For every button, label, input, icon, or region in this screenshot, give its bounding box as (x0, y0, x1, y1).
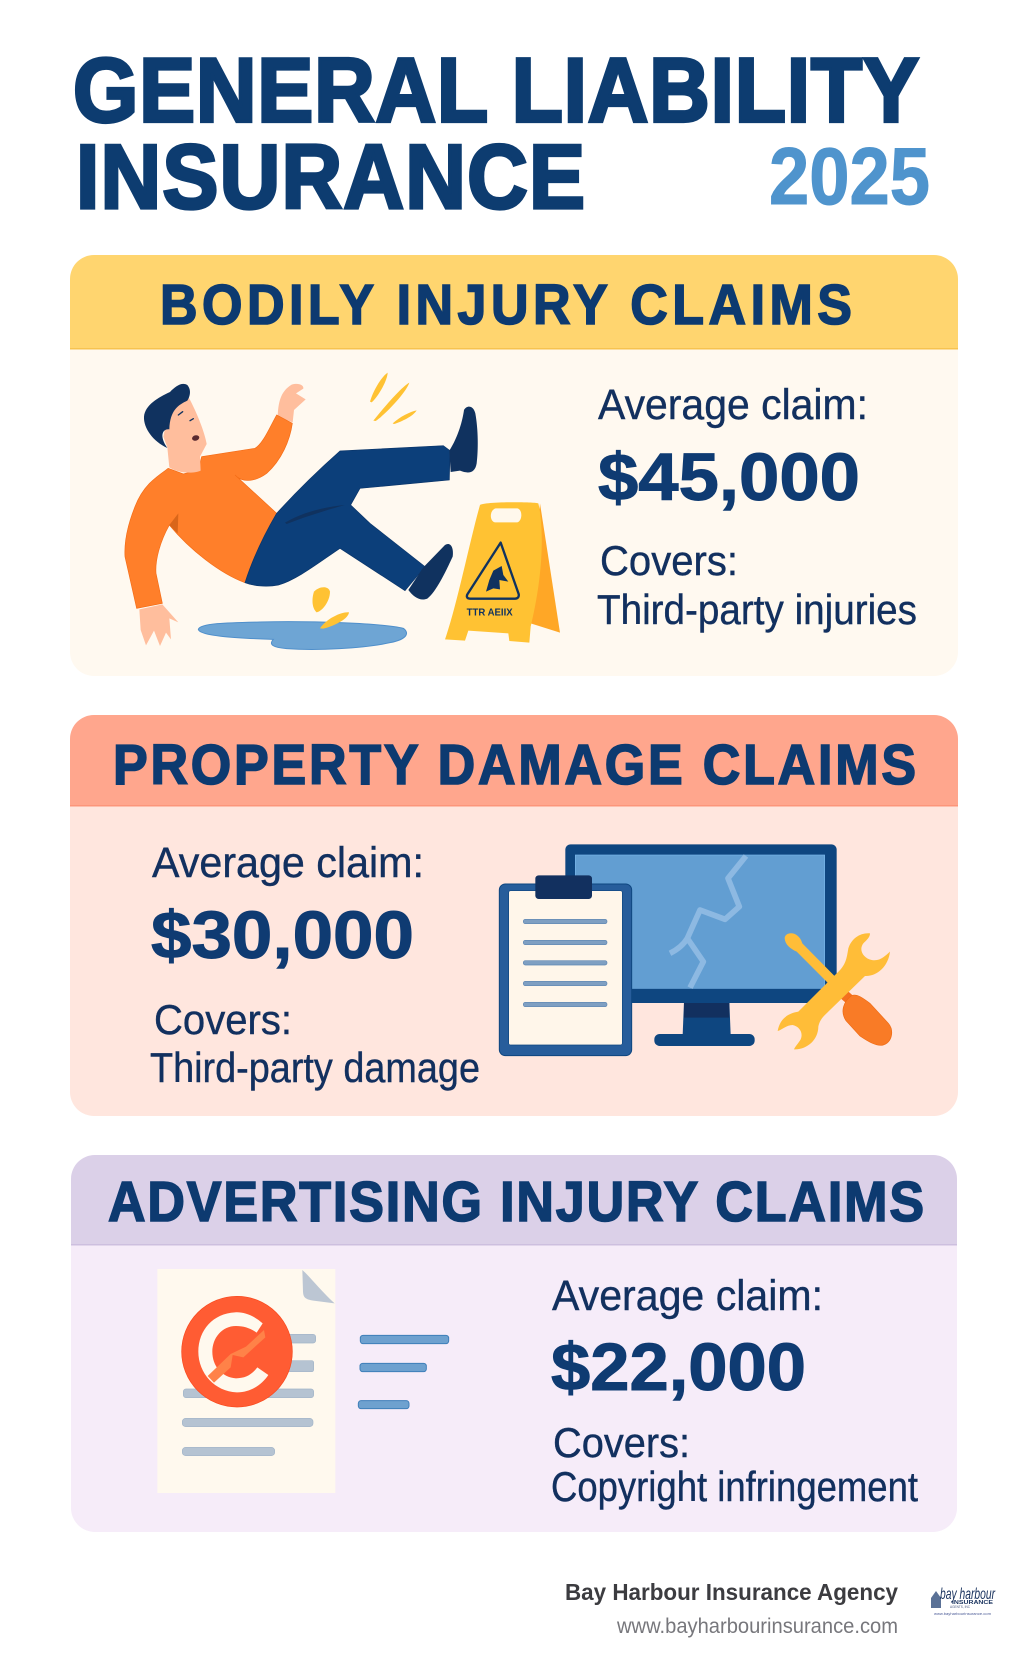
text: average claim label: Average claim: (152, 839, 424, 887)
lower hand (139, 604, 178, 646)
text: covers: Covers: (154, 996, 292, 1043)
text: average claim label: Average claim: (598, 381, 868, 429)
year 2025: 2025 (769, 132, 930, 222)
clipboard (499, 875, 632, 1056)
water splash drops (312, 373, 417, 629)
sweater (125, 415, 292, 608)
stat: $30,000: $30,000 (151, 898, 414, 973)
logo: bay harbour insurance (931, 1586, 995, 1616)
blue text lines (358, 1335, 449, 1409)
heading: property damage claims: PROPERTY DAMAGE CLAIMS (113, 734, 916, 796)
header band: property damage (70, 715, 958, 806)
header band: advertising injury (71, 1155, 957, 1245)
text: third-party injuries: Third-party injuries (597, 586, 917, 633)
text: third-party damage: Third-party damage (150, 1044, 480, 1091)
text: covers: Covers: (553, 1419, 690, 1466)
neck and face (163, 397, 207, 473)
title: INSURANCE (76, 126, 585, 228)
text: copyright infringement: Copyright infringement (551, 1463, 918, 1510)
logo: bay harbour insurance: www.bayharbourinsurance.com (934, 1612, 991, 1616)
document page (157, 1269, 335, 1493)
hair (144, 384, 190, 448)
heading: bodily injury claims: BODILY INJURY CLAIMS (160, 274, 852, 336)
illustration: cracked monitor, clipboard and tools (499, 844, 892, 1056)
monitor (565, 844, 837, 1046)
title (73, 40, 919, 228)
copyright symbol struck out (182, 1296, 292, 1407)
header band: bodily injury (70, 255, 958, 349)
title: GENERAL LIABILITY (73, 40, 919, 141)
shoes (408, 407, 478, 600)
text: covers: Covers: (600, 537, 738, 584)
screwdriver (785, 933, 892, 1045)
puddle (198, 622, 407, 649)
mouth (191, 434, 200, 442)
stat: $45,000: $45,000 (598, 440, 860, 515)
illustration: copyright document (157, 1269, 449, 1493)
trousers (245, 446, 450, 591)
panel: property damage claims (70, 715, 958, 1116)
logo: bay harbour insurance: INSURANCE (952, 1600, 993, 1606)
logo: bay harbour insurance: AGENTS, INC (950, 1605, 970, 1609)
panel: advertising injury claims (71, 1155, 957, 1532)
stat: $22,000: $22,000 (551, 1330, 806, 1405)
panel: bodily injury claims (70, 255, 958, 676)
logo: bay harbour insurance: bay harbour (940, 1586, 995, 1603)
illustration: person slipping on wet floor (125, 373, 560, 649)
wrench (778, 933, 890, 1049)
raised hand (278, 384, 306, 422)
heading: advertising injury claims: ADVERTISING INJURY CLAIMS (108, 1171, 924, 1233)
footer: agency name: Bay Harbour Insurance Agency (565, 1579, 898, 1605)
footer: website: www.bayharbourinsurance.com (616, 1615, 898, 1638)
text: average claim label: Average claim: (552, 1272, 823, 1320)
wet floor sign (445, 502, 560, 643)
wet floor sign: TTR AEIIX (467, 608, 513, 619)
